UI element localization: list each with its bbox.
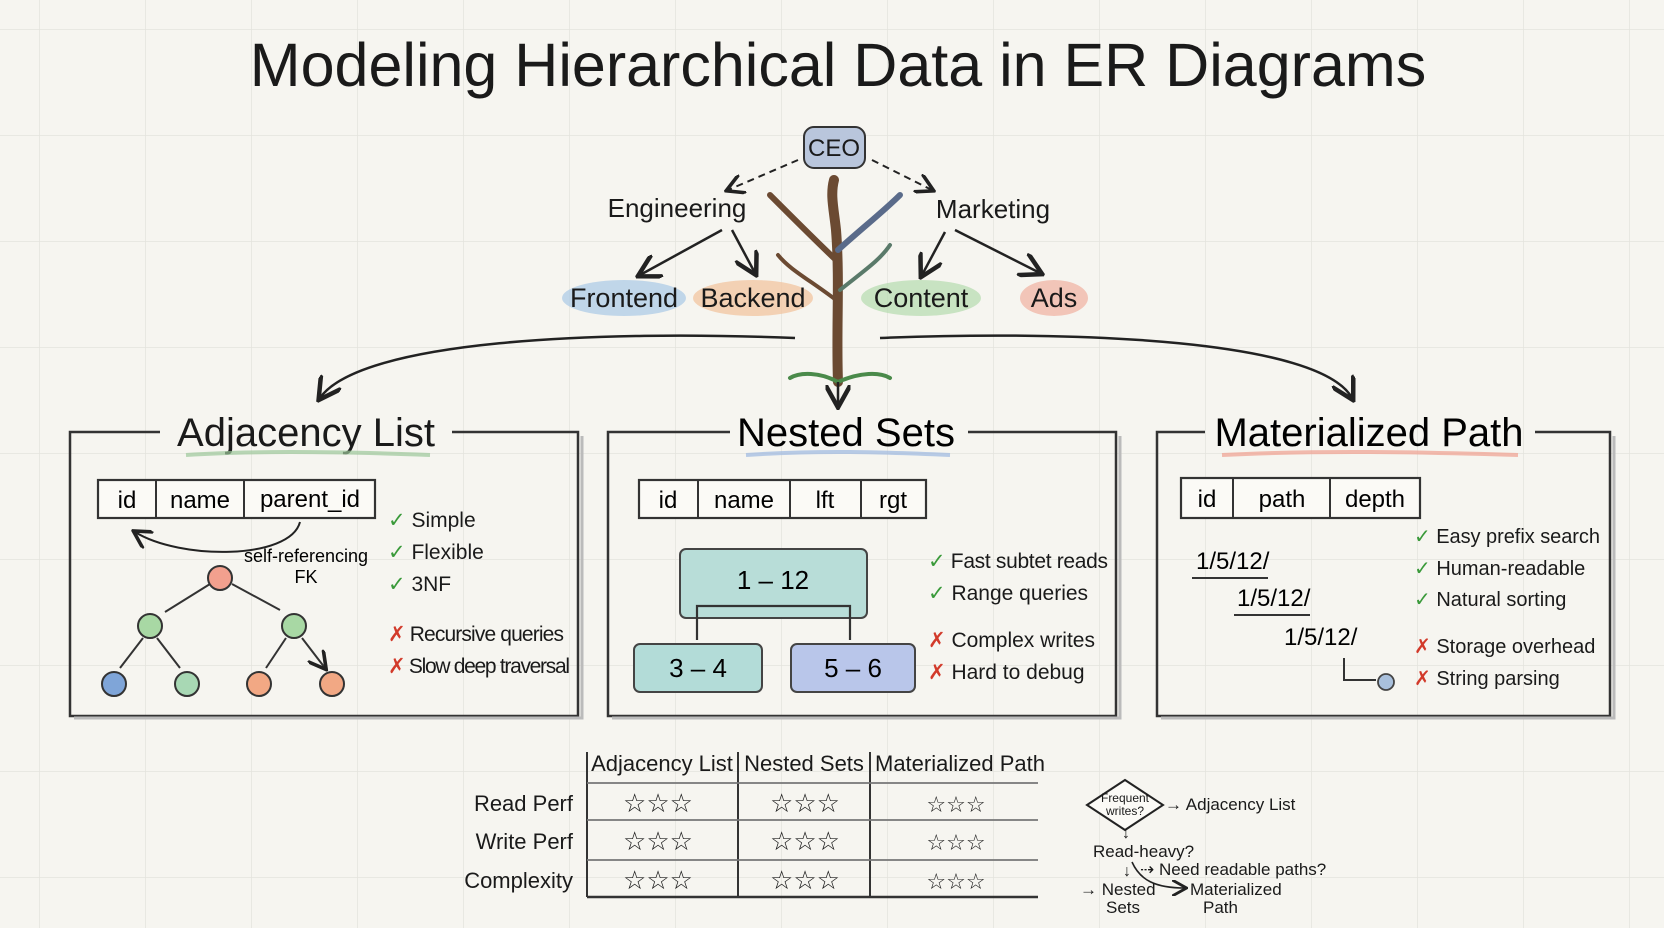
panel: materialized path: [1157, 411, 1614, 718]
hierarchy tree: [562, 127, 1088, 382]
CEO node: [804, 127, 865, 168]
comparison table: ☆☆☆: [926, 793, 986, 818]
comparison table: Materialized Path: [875, 751, 1045, 776]
decision flowchart: Frequent: [1101, 791, 1150, 805]
pros/cons: [388, 509, 570, 678]
panel: adjacency list: self-referencing: [244, 546, 368, 566]
panel: materialized path: ✓ Human-readable: [1414, 558, 1585, 580]
table: nested sets: rgt: [879, 487, 907, 514]
nested boxes: 1 – 12: [737, 565, 809, 595]
comparison table: ☆☆☆: [623, 866, 693, 896]
panel: adjacency list: FK: [294, 567, 318, 587]
heading: materialized path: Materialized Path: [1214, 411, 1524, 455]
CEO node: CEO: [808, 135, 860, 162]
arrow: to materialized path: [880, 336, 1352, 398]
heading: adjacency list: Adjacency List: [177, 411, 435, 455]
panel: materialized path: 1/5/12/: [1284, 624, 1358, 651]
comparison table: ☆☆☆: [770, 827, 840, 857]
icon: tree: [770, 180, 900, 382]
arrow: to nested sets: [837, 382, 839, 405]
table: adjacency: id: [118, 487, 136, 514]
decision flowchart: → Adjacency List: [1165, 795, 1296, 814]
pros/cons: ✗ Recursive queries: [388, 623, 564, 646]
nested boxes: [634, 549, 915, 692]
comparison table: [464, 751, 1045, 897]
decision flowchart: [1080, 780, 1326, 917]
table: adjacency: [98, 480, 375, 518]
decision flowchart: Materialized: [1190, 880, 1282, 899]
panel: materialized path: ✗ String parsing: [1414, 668, 1560, 690]
table: nested sets: lft: [816, 487, 835, 514]
decision flowchart: ⇢ Need readable paths?: [1140, 860, 1326, 879]
hierarchy tree: Ads: [1031, 283, 1077, 313]
comparison table: ☆☆☆: [926, 831, 986, 856]
table: materialized: id: [1198, 486, 1216, 513]
panel: nested sets: ✗ Complex writes: [928, 629, 1095, 652]
panel: materialized path: ✗ Storage overhead: [1414, 636, 1595, 658]
hierarchy tree: Engineering: [608, 193, 746, 223]
comparison table: ☆☆☆: [623, 827, 693, 857]
nested boxes: 5 – 6: [824, 653, 882, 683]
decision flowchart: ↓: [1123, 863, 1131, 880]
tree diagram: [102, 566, 344, 696]
panel: nested sets: ✓ Range queries: [928, 582, 1088, 605]
nested boxes: 3 – 4: [669, 653, 727, 683]
comparison table: Write Perf: [476, 829, 574, 854]
hierarchy tree: Marketing: [936, 194, 1050, 224]
pros/cons: ✓ 3NF: [388, 573, 451, 596]
comparison table: Adjacency List: [591, 751, 733, 776]
comparison table: ☆☆☆: [623, 789, 693, 819]
decision flowchart: Path: [1203, 898, 1238, 917]
pros/cons: ✗ Slow deep traversal: [388, 655, 570, 678]
table: materialized: [1181, 478, 1420, 518]
decision flowchart: Read-heavy?: [1093, 842, 1194, 861]
panel: materialized path: ✓ Natural sorting: [1414, 589, 1566, 611]
comparison table: ☆☆☆: [770, 866, 840, 896]
arrow: to adjacency list: [320, 336, 795, 398]
title: Modeling Hierarchical Data in ER Diagrams: [250, 31, 1426, 99]
decision flowchart: → Nested: [1080, 880, 1156, 899]
pros/cons: ✓ Flexible: [388, 541, 484, 564]
table: materialized: depth: [1345, 486, 1405, 513]
hierarchy tree: Backend: [700, 283, 806, 313]
table: adjacency: name: [170, 487, 230, 514]
table: nested sets: [639, 480, 926, 518]
pros/cons: ✓ Simple: [388, 509, 476, 532]
table: nested sets: name: [714, 487, 774, 514]
table: nested sets: id: [659, 487, 677, 514]
panel: nested sets: ✓ Fast subtet reads: [928, 550, 1108, 573]
panel: nested sets: [608, 411, 1120, 718]
panel: materialized path: 1/5/12/: [1237, 585, 1311, 612]
heading: nested sets: Nested Sets: [737, 411, 955, 455]
table: materialized: path: [1259, 486, 1305, 513]
hierarchy tree: Frontend: [570, 283, 678, 313]
panel: materialized path: 1/5/12/: [1196, 548, 1270, 575]
comparison table: Nested Sets: [744, 751, 864, 776]
table: adjacency: parent_id: [260, 486, 360, 513]
panel: materialized path: ✓ Easy prefix search: [1414, 526, 1600, 548]
decision flowchart: writes?: [1105, 804, 1144, 818]
decision flowchart: Sets: [1106, 898, 1140, 917]
panel: adjacency list: [70, 411, 582, 718]
comparison table: Read Perf: [474, 791, 574, 816]
hierarchy tree: Content: [874, 283, 969, 313]
comparison table: ☆☆☆: [926, 870, 986, 895]
comparison table: ☆☆☆: [770, 789, 840, 819]
panel: nested sets: ✗ Hard to debug: [928, 661, 1085, 684]
decision flowchart: ↓: [1122, 825, 1130, 842]
comparison table: Complexity: [464, 868, 573, 893]
